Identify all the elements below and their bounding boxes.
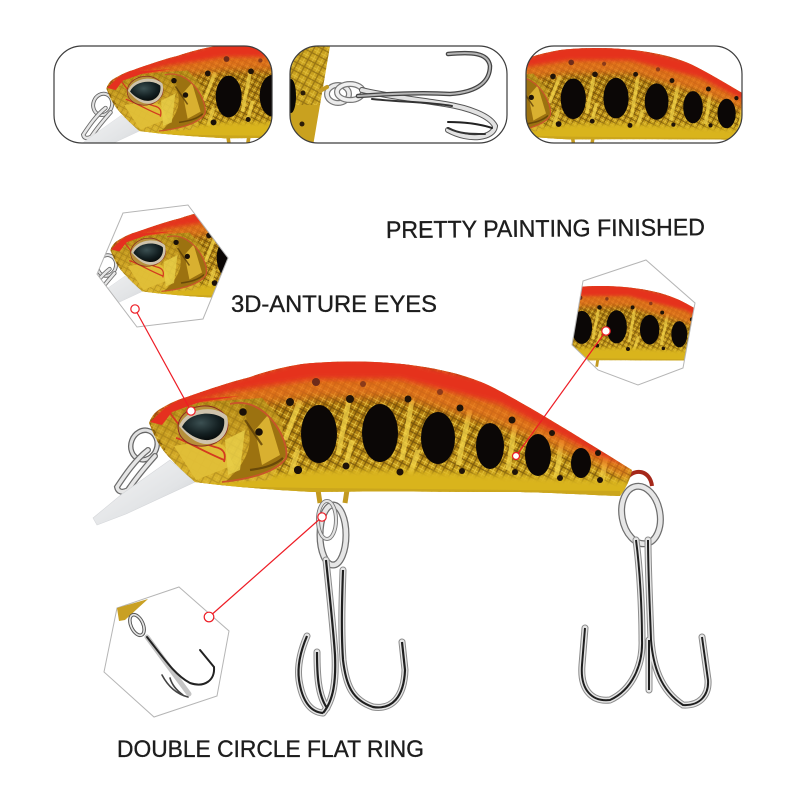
head plate [150, 398, 285, 484]
panel: treble hook close-up thumbnail [285, 46, 507, 146]
belly eyelets [318, 490, 347, 503]
front split rings [117, 426, 161, 492]
panel: head close-up thumbnail [53, 45, 273, 144]
small dots [286, 378, 603, 483]
belly ring [318, 501, 346, 565]
lure belly fragment [117, 599, 148, 621]
diving lip [93, 460, 195, 525]
heading: pretty painting finished: PRETTY PAINTING FINISHED [386, 214, 705, 244]
rear eyelet [627, 472, 652, 486]
large black spots [301, 404, 591, 478]
tail ring [617, 483, 665, 547]
small hook [127, 612, 214, 697]
label: double circle flat ring: DOUBLE CIRCLE FLAT RING [117, 736, 424, 763]
leader line: painted body [512, 327, 610, 460]
belly treble hook [298, 560, 405, 713]
eye [175, 403, 231, 449]
callout: painted body hexagon [572, 260, 696, 386]
leader line: flat ring [204, 513, 326, 622]
lure body [140, 355, 640, 500]
callout: eye hexagon [96, 204, 228, 328]
illustration: main fishing lure [93, 355, 708, 713]
label: 3D-anture eyes: 3D-ANTURE EYES [231, 291, 437, 318]
callout: flat ring hexagon [104, 587, 229, 717]
panel: painted body close-up thumbnail [525, 45, 743, 144]
tail treble hook [582, 540, 708, 705]
gold highlight streaks [285, 395, 606, 482]
leader line: eye [131, 305, 195, 415]
